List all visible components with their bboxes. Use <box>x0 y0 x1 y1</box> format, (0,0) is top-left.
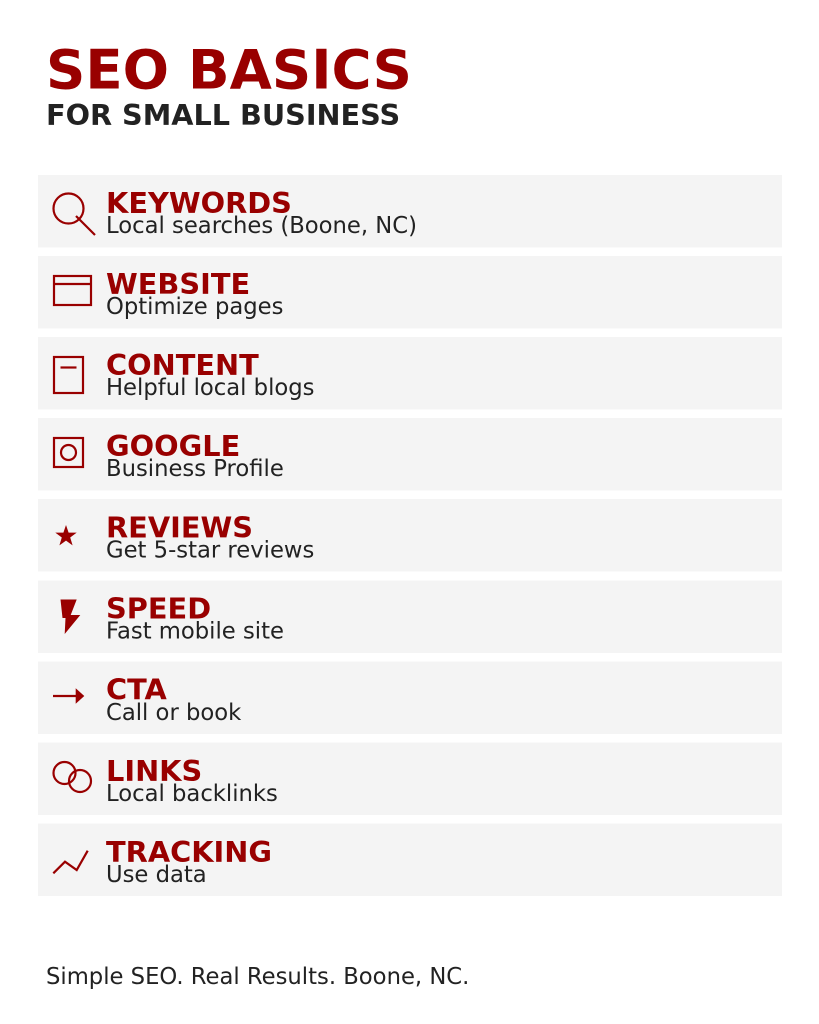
heading: cta: CTA <box>106 672 168 706</box>
text: speed: Fast mobile site <box>106 618 284 644</box>
heading: reviews: REVIEWS <box>106 510 253 544</box>
panel: keywords <box>38 175 782 248</box>
heading: google: GOOGLE <box>106 429 240 463</box>
footer: Simple SEO. Real Results. Boone, NC. <box>46 964 469 990</box>
text: reviews: Get 5-star reviews <box>106 538 314 564</box>
panel: website <box>38 256 782 328</box>
title: SEO BASICS <box>46 38 412 102</box>
heading: content: CONTENT <box>106 348 259 382</box>
icon: profile square <box>54 438 83 467</box>
icon: linked circles <box>54 762 91 792</box>
panel: reviews <box>38 499 782 572</box>
icon: arrow <box>53 688 84 704</box>
panel: content <box>38 337 782 410</box>
text: cta: Call or book <box>106 700 242 726</box>
heading: website: WEBSITE <box>106 267 250 301</box>
heading: keywords: KEYWORDS <box>106 186 292 220</box>
text: content: Helpful local blogs <box>106 375 314 401</box>
icon: document <box>54 357 83 393</box>
icon: star <box>55 525 77 545</box>
panel: tracking <box>38 824 782 896</box>
text: google: Business Profile <box>106 456 284 482</box>
subtitle: FOR SMALL BUSINESS <box>46 98 400 132</box>
text: links: Local backlinks <box>106 781 278 807</box>
panel: google <box>38 418 782 490</box>
icon: lightning bolt <box>60 600 80 634</box>
panel: cta <box>38 662 782 734</box>
panel: speed <box>38 580 782 653</box>
heading: links: LINKS <box>106 754 202 788</box>
icon: trend line <box>53 851 88 873</box>
icon: magnifying glass <box>54 194 95 235</box>
text: tracking: Use data <box>106 862 207 888</box>
text: website: Optimize pages <box>106 294 283 320</box>
panel: links <box>38 742 782 815</box>
heading: speed: SPEED <box>106 592 211 626</box>
icon: browser window <box>54 276 91 305</box>
heading: tracking: TRACKING <box>106 835 272 869</box>
text: keywords: Local searches (Boone, NC) <box>106 213 417 239</box>
